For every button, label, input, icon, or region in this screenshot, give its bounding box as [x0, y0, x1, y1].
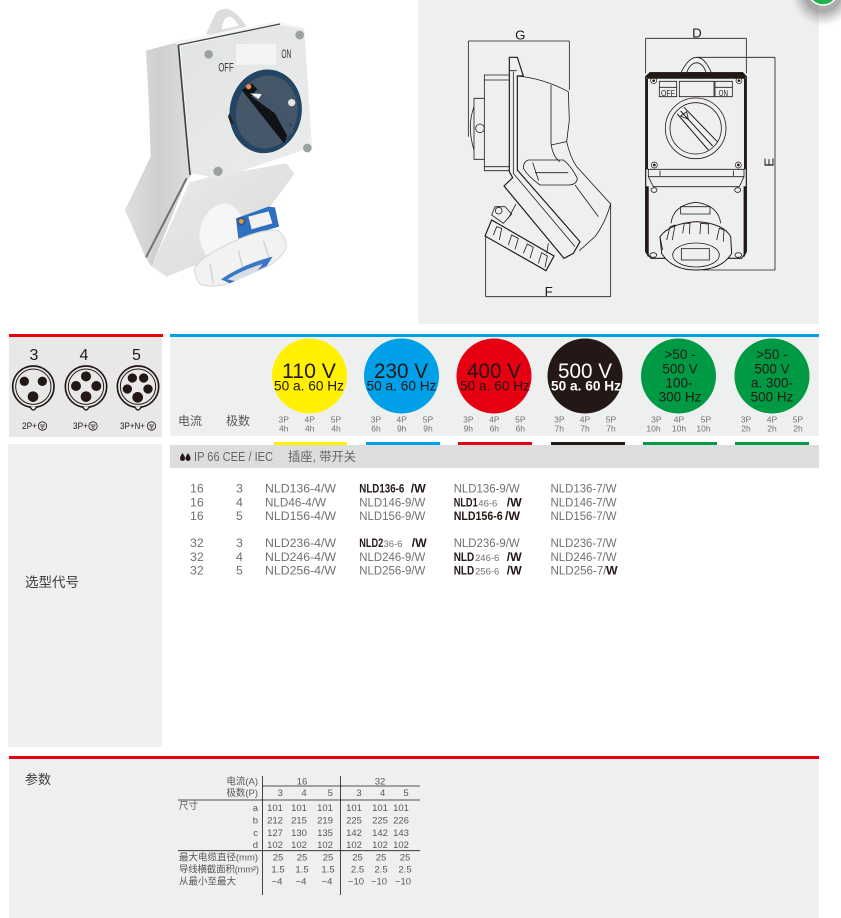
table values: 5 [403, 788, 409, 799]
group: 16 A models: NLD136-9/W [454, 482, 520, 496]
table values: 4 [380, 788, 385, 799]
table values: 3 [356, 788, 362, 799]
pole and hour labels: 3P [554, 414, 565, 424]
pole and hour labels: 4P [674, 414, 685, 424]
table values: 215 [291, 816, 307, 826]
front view: OFF [661, 88, 675, 98]
pole and hour labels [278, 414, 804, 434]
table values [267, 776, 412, 888]
pole and hour labels: 4h [331, 424, 341, 434]
table values: 1.5 [321, 864, 335, 876]
pole and hour labels: 3P [651, 414, 662, 424]
group: 16 A models: NLD146-9/W [359, 496, 426, 510]
table values: 25 [273, 852, 283, 864]
table: parameters: 导线横截面积(mm²) [179, 864, 259, 876]
table values: −4 [272, 876, 282, 888]
ring handle [206, 9, 247, 35]
table values: 226 [393, 816, 409, 826]
pole and hour labels: 9h [423, 424, 433, 434]
group: 32 A models: NLD246-7/W [550, 550, 617, 564]
group: 32 A models: NLD256-4/W [265, 564, 336, 578]
row headings: d [253, 840, 258, 851]
table values: 2.5 [398, 864, 412, 876]
voltage circle 110 V: 50 a. 60 Hz [274, 378, 344, 394]
table rules [178, 776, 420, 895]
earth symbols [38, 422, 156, 430]
pole and hour labels: 5P [515, 414, 526, 424]
group: 32 A models: NLD236-4/W [265, 536, 336, 550]
front view: ON [719, 88, 728, 98]
pole and hour labels: 9h [397, 424, 407, 434]
table values: 101 [267, 803, 283, 814]
table values: −4 [322, 876, 332, 888]
pole and hour labels: 9h [464, 424, 473, 434]
table: parameters: 尺寸 [179, 800, 199, 812]
band: product heading: 插座, 带开关 [288, 449, 356, 464]
table values: 16 [297, 776, 307, 788]
pole and hour labels: 5P [793, 414, 804, 424]
table values: 2.5 [351, 864, 364, 876]
pole and hour labels: 4P [396, 414, 407, 424]
voltage circle 230 V: 230 V [374, 360, 428, 383]
group: 16 A models: NLD156-6 [454, 509, 503, 523]
pole and hour labels: 6h [516, 424, 525, 434]
group: 16 A models: NLD136-4/W [265, 482, 336, 496]
pole and hour labels: 5P [423, 414, 434, 424]
dimension F [486, 203, 611, 299]
group: 32 A models: 32 [190, 550, 204, 564]
table values: 212 [267, 816, 283, 826]
voltage circle 500 V: 50 a. 60 Hz [551, 378, 621, 394]
group: 16 A models: 46-6 [478, 498, 497, 510]
side view [470, 57, 611, 271]
group: 32 A models: NLD236-9/W [454, 536, 520, 550]
group: 32 A models: /W [412, 536, 427, 550]
table values: 102 [346, 840, 362, 851]
table values: −4 [296, 876, 306, 888]
pole and hour labels: 2h [767, 424, 777, 434]
corner badge: green circle [791, 0, 841, 26]
dimension D: D [692, 25, 702, 40]
pin diagrams [13, 366, 159, 410]
voltage circle 500 V: 500 V [558, 360, 612, 383]
group: 16 A models: NLD156-4/W [265, 509, 336, 523]
pole and hour labels: 3P [278, 414, 289, 424]
pole and hour labels: 6h [490, 424, 499, 434]
table values: 25 [376, 852, 386, 864]
group: 16 A models: NLD46-4/W [265, 496, 326, 510]
column headings: 极数 [226, 413, 250, 428]
voltage circle 50-500 V 300-500 Hz: >50 - [756, 347, 788, 362]
pole and hour labels: 10h [696, 424, 711, 434]
dimension drawings [468, 25, 776, 299]
pole and hour labels: 4h [305, 424, 315, 434]
group: 16 A models: NLD156-7/W [550, 509, 617, 523]
table values: 25 [297, 852, 307, 864]
panel: parameters [9, 756, 819, 918]
group: 32 A models: W [606, 564, 618, 578]
table: model numbers [190, 482, 618, 578]
pin configuration captions: 3P+ [73, 421, 88, 432]
socket neck [199, 203, 247, 258]
group: 32 A models: NLD236-7/W [550, 536, 617, 550]
table values: 102 [267, 840, 283, 851]
table values: 225 [346, 816, 362, 826]
table values: 2.5 [374, 864, 388, 876]
pole and hour labels: 10h [646, 424, 661, 434]
group: 32 A models: /W [507, 550, 522, 564]
row headings: 极数(P) [226, 787, 258, 799]
voltage circle 400 V: 50 a. 60 Hz [460, 378, 530, 394]
group: 16 A models: NLD1 [454, 496, 478, 510]
table values: 25 [352, 852, 363, 864]
blue latch [236, 207, 279, 239]
group: 32 A models: NLD2 [359, 536, 383, 550]
pole and hour labels: 7h [555, 424, 564, 434]
table values: 135 [317, 828, 333, 839]
dimension E [697, 57, 776, 270]
dimension D [646, 25, 746, 73]
group: 32 A models: NLD256-9/W [359, 564, 426, 578]
label plate [236, 44, 276, 65]
group: 16 A models: NLD136-7/W [550, 482, 617, 496]
voltage circle 500 V [548, 338, 622, 414]
pin configuration captions: 2P+ [22, 421, 37, 432]
voltage circle 50-500 V 300-500 Hz [734, 338, 810, 414]
group: 16 A models: /W [505, 509, 520, 523]
voltage circle 110 V [272, 338, 347, 414]
group: 16 A models: 16 [190, 509, 204, 523]
panel: dimension drawing background [418, 0, 819, 324]
table values: 142 [372, 828, 388, 839]
heading text: IP 66 CEE / IEC [194, 450, 273, 464]
group: 32 A models: NLD246-9/W [359, 550, 426, 564]
product photo: socket with switch [125, 9, 312, 286]
group: 32 A models [190, 536, 618, 578]
table values: 219 [317, 816, 333, 826]
table values: 101 [393, 803, 409, 814]
group: 16 A models: 16 [190, 482, 204, 496]
group: 16 A models: /W [507, 496, 522, 510]
lid face [181, 25, 312, 178]
lid screws [204, 31, 312, 176]
group: 32 A models: 32 [190, 564, 204, 578]
voltage circle 50-500 V 300-500 Hz: 500 V [754, 362, 790, 376]
group: 32 A models: 36-6 [384, 539, 403, 550]
table values: 1.5 [295, 864, 309, 876]
table values: 225 [372, 816, 388, 826]
table values: 32 [375, 776, 385, 788]
table: parameters [178, 776, 420, 895]
pin configuration captions [22, 421, 145, 432]
pole and hour labels: 3P [371, 414, 382, 424]
pole and hour labels: 10h [672, 424, 686, 434]
group: 32 A models: 4 [236, 550, 243, 564]
label: model selection: 选型代号 [25, 575, 79, 590]
front view [646, 57, 746, 270]
group: 32 A models: /W [507, 564, 522, 578]
pole and hour labels: 3P [741, 414, 752, 424]
pole and hour labels: 4P [580, 414, 591, 424]
row headings: c [253, 828, 258, 839]
row headings: 电流(A) [226, 776, 258, 788]
table values: 25 [400, 852, 410, 864]
table: parameters: 从最小至最大 [179, 876, 237, 888]
colour key bars [274, 442, 809, 445]
voltage circle 50-500 V 100-300 Hz [641, 338, 716, 414]
group: 16 A models: 3 [236, 482, 243, 496]
voltage circle 50-500 V 100-300 Hz: >50 - [664, 347, 696, 362]
voltage circle 50-500 V 100-300 Hz: 100- [665, 376, 693, 390]
lower cover [152, 163, 294, 277]
back body [125, 43, 192, 267]
pole and hour labels: 3P [463, 414, 474, 424]
table values: 101 [346, 803, 362, 814]
table values: 4 [301, 788, 307, 799]
group: 32 A models: 5 [236, 564, 243, 578]
voltage circle 400 V: 400 V [467, 360, 521, 383]
table values: 102 [393, 840, 409, 851]
pin configuration captions: 3P+N+ [120, 421, 145, 432]
pole and hour labels: 2h [741, 424, 751, 434]
group: 32 A models: 32 [190, 536, 204, 550]
table values: 130 [291, 828, 307, 839]
table values: 102 [317, 840, 333, 851]
table values: 101 [317, 803, 333, 814]
table values: 143 [393, 828, 409, 839]
pole and hour labels: 2h [793, 424, 803, 434]
dimension G: G [515, 27, 526, 42]
pole count labels: 4 [80, 347, 89, 364]
table values: 5 [328, 788, 333, 799]
row headings: b [253, 816, 258, 826]
pole and hour labels: 5P [606, 414, 617, 424]
socket collar [195, 230, 286, 286]
group: 16 A models: NLD156-9/W [359, 509, 426, 523]
row headings [226, 776, 259, 851]
pole count labels [30, 347, 141, 364]
group: 32 A models: NLD246-4/W [265, 550, 336, 564]
pole and hour labels: 4P [304, 414, 315, 424]
pole count labels: 3 [30, 347, 39, 364]
pole and hour labels: 5P [331, 414, 342, 424]
group: 16 A models: 5 [236, 509, 243, 523]
group: 16 A models: 4 [236, 496, 243, 510]
table values: 3 [278, 788, 283, 799]
table values: 1.5 [271, 864, 285, 876]
table values: 142 [346, 828, 362, 839]
table values: 102 [372, 840, 388, 851]
voltage circle 230 V: 50 a. 60 Hz [366, 378, 437, 394]
voltage circle 50-500 V 100-300 Hz: 500 V [662, 362, 698, 376]
voltage circle 50-500 V 300-500 Hz: a. 300- [751, 376, 793, 390]
group: 16 A models: NLD146-7/W [550, 496, 617, 510]
table values: 101 [291, 803, 307, 814]
table values: −10 [371, 876, 387, 888]
knob [223, 64, 308, 159]
group: 32 A models: NLD [454, 564, 474, 578]
pole and hour labels: 4P [767, 414, 778, 424]
table values: 101 [372, 803, 388, 814]
group: 16 A models: 16 [190, 496, 204, 510]
row headings: a [253, 803, 259, 814]
table values: 25 [323, 852, 333, 864]
OFF label: OFF [218, 61, 234, 75]
panel: model selection label column [8, 444, 162, 747]
icon: water drops [180, 453, 191, 461]
pole and hour labels: 5P [701, 414, 712, 424]
voltage circle 110 V: 110 V [282, 360, 336, 383]
pole and hour labels: 7h [606, 424, 616, 434]
label: parameters: 参数 [25, 772, 51, 787]
group: 32 A models: 3 [236, 536, 243, 550]
group: 32 A models: 246-6 [475, 553, 499, 564]
dimension G [468, 27, 569, 137]
voltage circle 50-500 V 300-500 Hz: 500 Hz [751, 390, 794, 404]
voltage circle 230 V [364, 338, 439, 414]
column headings [178, 413, 250, 428]
group: 32 A models: NLD [454, 550, 474, 564]
ON label: ON [281, 47, 291, 61]
table values: −10 [395, 876, 411, 888]
table values: −10 [348, 876, 364, 888]
group: 32 A models: 256-6 [475, 566, 499, 578]
pole and hour labels: 7h [580, 424, 590, 434]
table: parameters: 最大电缆直径(mm) [179, 852, 258, 864]
lid rim [174, 21, 305, 176]
pole and hour labels: 4h [279, 424, 289, 434]
group: 16 A models: NLD136-6 [359, 482, 404, 496]
dimension E: E [761, 158, 776, 167]
pole and hour labels: 6h [371, 424, 381, 434]
column headings: 电流 [178, 414, 202, 428]
table values: 127 [267, 828, 283, 839]
table values: 102 [291, 840, 307, 851]
panel: voltage header [170, 334, 819, 436]
group: 16 A models: /W [411, 482, 426, 496]
pole count labels: 5 [132, 347, 141, 364]
panel: plug pin layouts [9, 334, 163, 437]
group: 16 A models [190, 482, 617, 523]
dimension F: F [545, 284, 553, 299]
pole and hour labels: 4P [489, 414, 500, 424]
voltage circle 50-500 V 100-300 Hz: 300 Hz [659, 390, 702, 404]
band: product heading [170, 445, 819, 468]
voltage circle 400 V [456, 338, 532, 414]
group: 32 A models: NLD256-7/ [550, 564, 607, 578]
